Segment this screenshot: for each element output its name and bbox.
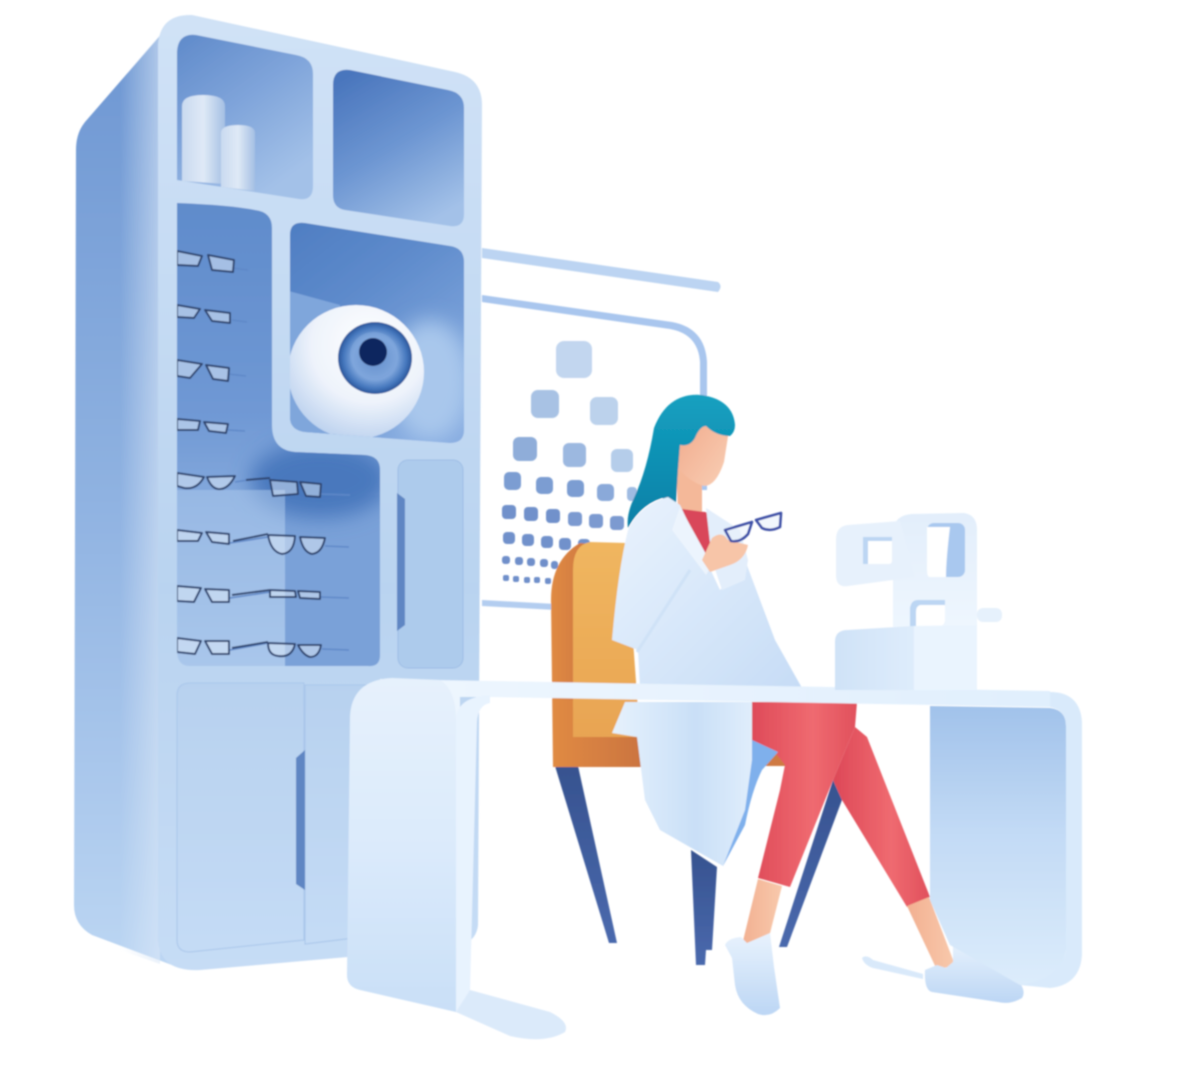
cabinet top right compartment (333, 70, 464, 226)
face (678, 415, 729, 486)
glasses display rods (228, 374, 350, 652)
chair legs (555, 766, 842, 965)
pants legs (742, 702, 955, 970)
red shirt (682, 509, 712, 560)
neck (676, 465, 702, 515)
chair back (551, 542, 790, 767)
glasses pairs (177, 251, 325, 657)
cabinet side (74, 30, 240, 968)
desk (347, 678, 1082, 1039)
lab coat (612, 497, 802, 866)
cabinet glasses compartment (177, 200, 390, 670)
eye chart dots (502, 341, 637, 584)
device frames (836, 513, 1002, 627)
cabinet front (158, 15, 482, 970)
eyeball (288, 305, 424, 439)
desk left leg (347, 678, 566, 1039)
desk device: phoropter (835, 513, 1002, 690)
hand (702, 534, 748, 572)
cabinet top left compartment (177, 35, 313, 199)
door handle (296, 750, 305, 890)
desk right edge (1020, 692, 1082, 988)
desk top (380, 679, 1050, 720)
cabinet lower doors (177, 683, 370, 952)
chair (551, 542, 842, 965)
door handle (397, 493, 405, 631)
iris (338, 322, 412, 394)
desk foot (456, 990, 566, 1039)
glasses in hand (725, 513, 781, 541)
cabinet small door (397, 460, 463, 668)
calves (742, 879, 955, 970)
desk inner right panel (930, 706, 1066, 985)
cabinet eye compartment (289, 222, 465, 444)
device base (835, 625, 977, 690)
doctor figure (612, 395, 1024, 1015)
hair (628, 395, 735, 528)
lab coat lining (723, 740, 778, 866)
bottles (182, 95, 255, 191)
eye chart board (482, 248, 720, 610)
cabinet (74, 15, 482, 970)
shoes (725, 933, 1024, 1015)
